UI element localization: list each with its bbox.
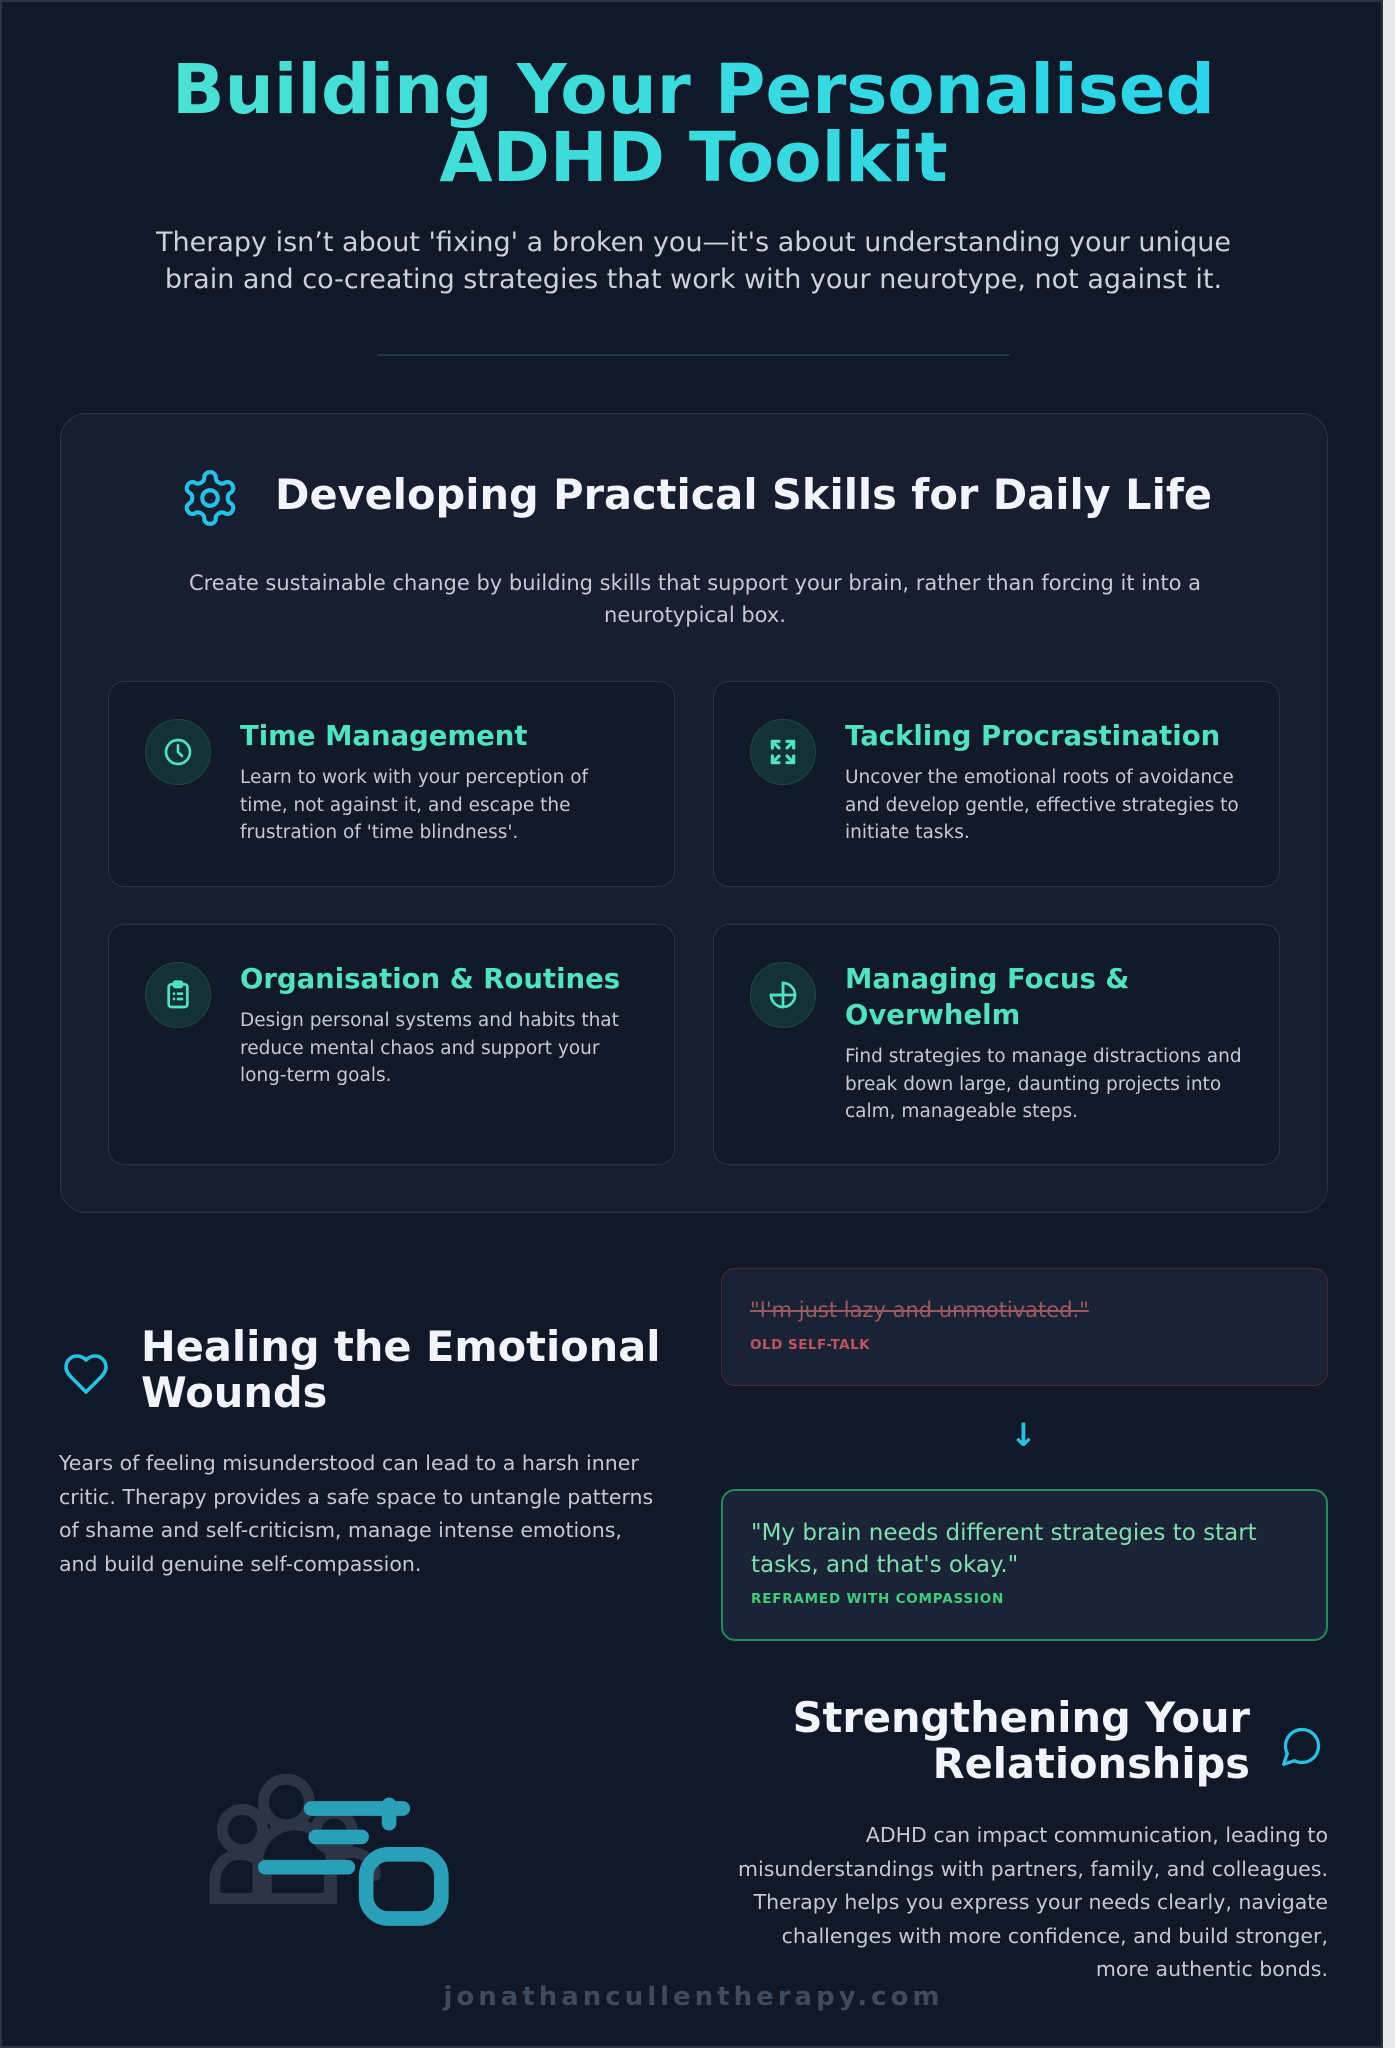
heading: relationships: Relationships <box>933 1739 1250 1788</box>
heading: relationships <box>793 1693 1250 1788</box>
card: time management <box>108 681 675 887</box>
card: procrastination: Tackling Procrastination <box>845 720 1220 752</box>
icon: pie <box>750 962 816 1028</box>
card: time management: Time Management <box>240 720 528 752</box>
card: time management: Learn to work with your perception of time, not against it, and escape the frustration of 'time blindness'. <box>240 767 588 843</box>
panel heading: Developing Practical Skills for Daily Life <box>275 470 1212 519</box>
card: organisation: Organisation & Routines <box>240 963 620 995</box>
icon: gear <box>184 470 236 526</box>
callout: reframed: "My brain needs different strategies to start tasks, and that's okay." <box>751 1520 1257 1578</box>
icon: speech bubble <box>1282 1728 1320 1766</box>
callout: old self-talk <box>721 1268 1328 1386</box>
icon: expand arrows <box>750 719 816 785</box>
card: procrastination <box>713 681 1280 887</box>
title <box>2 56 1385 192</box>
card: organisation: Design personal systems and habits that reduce mental chaos and support your long-term goals. <box>240 1010 619 1086</box>
title: ADHD Toolkit <box>439 118 948 198</box>
card: procrastination: Uncover the emotional roots of avoidance and develop gentle, effective strategies to initiate tasks. <box>845 767 1239 843</box>
icon: heart <box>64 1354 108 1394</box>
heading: emotional wounds: Healing the Emotional <box>141 1322 660 1371</box>
callout: old self-talk: OLD SELF-TALK <box>750 1337 870 1353</box>
card: organisation <box>108 924 675 1165</box>
callout: reframed <box>721 1489 1328 1641</box>
panel: practical skills <box>60 413 1328 1213</box>
card: focus <box>713 924 1280 1165</box>
text: relationships body: ADHD can impact communication, leading to misunderstandings with partners, family, and colleagues. Therapy helps you express your needs clearly, navigate challenges with more confidence, and build stronger, more authentic bonds. <box>738 1823 1328 1981</box>
heading: emotional wounds <box>141 1322 660 1417</box>
illustration: relationships <box>210 1774 449 1926</box>
footer: jonathancullentherapy.com <box>443 1982 944 2012</box>
callout: reframed: REFRAMED WITH COMPASSION <box>751 1591 1004 1607</box>
icon: clock <box>145 719 211 785</box>
arrow: ↓ <box>1010 1416 1037 1454</box>
heading: relationships: Strengthening Your <box>793 1693 1250 1742</box>
card: focus: Find strategies to manage distractions and break down large, daunting projects into calm, manageable steps. <box>845 1046 1242 1122</box>
text: emotional body: Years of feeling misunderstood can lead to a harsh inner critic. Therapy provides a safe space to untangle patterns of shame and self-criticism, manage intense emotions, and build genuine self-compassion. <box>59 1451 653 1576</box>
card: focus: Overwhelm <box>845 999 1020 1031</box>
subtitle: Therapy isn’t about 'fixing' a broken you—it's about understanding your unique brain and co-creating strategies that work with your neurotype, not against it. <box>156 227 1231 295</box>
panel description: Create sustainable change by building skills that support your brain, rather than forcing it into a neurotypical box. <box>189 571 1201 627</box>
icon: clipboard <box>145 962 211 1028</box>
title: Building Your Personalised <box>172 50 1215 130</box>
callout: old self-talk: "I'm just lazy and unmotivated." <box>750 1298 1089 1322</box>
card: focus: Managing Focus & <box>845 963 1129 995</box>
heading: emotional wounds: Wounds <box>141 1368 327 1417</box>
